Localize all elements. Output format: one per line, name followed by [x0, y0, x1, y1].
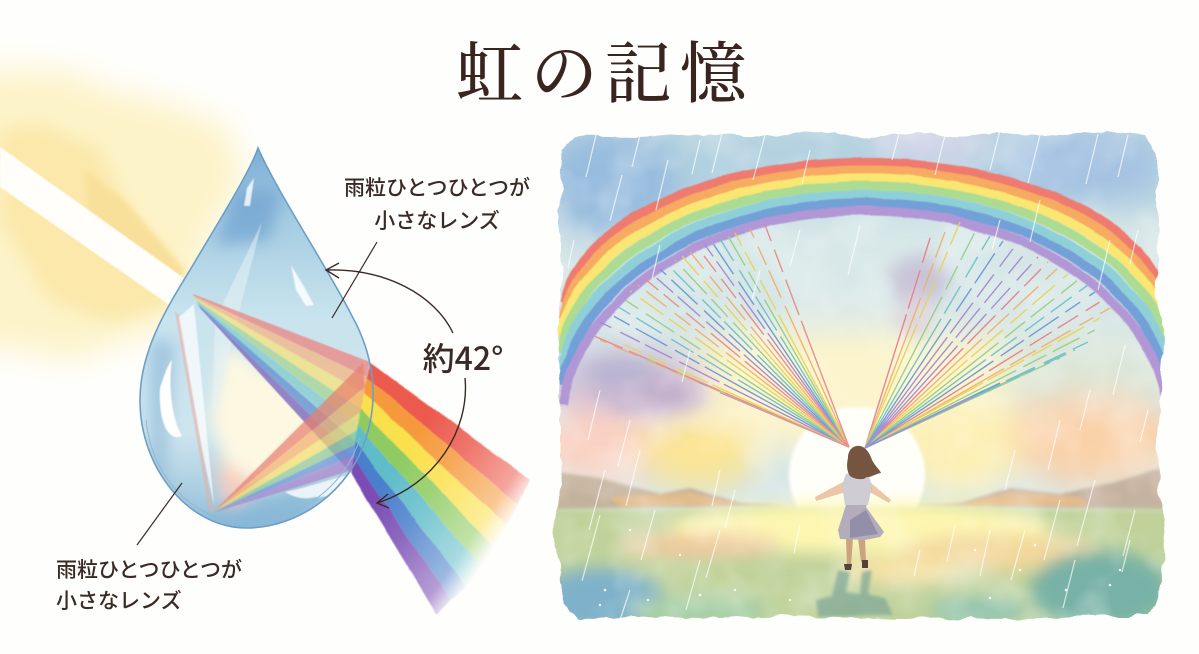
label: lower: 雨粒ひとつひとつが: [56, 554, 242, 584]
sky and land washes: [552, 130, 1166, 621]
arrow: upper arc to drop: [326, 263, 453, 333]
label: angle: 約42°: [423, 334, 503, 380]
white light beam: [0, 147, 196, 304]
internal reflected pink ray: [175, 312, 213, 513]
sun: [788, 406, 926, 508]
water drop body: [140, 148, 373, 540]
internal dispersed rainbow, reflected leg: [212, 363, 370, 513]
label: lower: 小さなレンズ: [56, 585, 182, 615]
yellow sunlight wash: [0, 70, 245, 362]
outgoing rainbow beam: [351, 362, 530, 615]
internal dispersed rainbow, first leg: [193, 294, 370, 473]
leader line: upper label: [332, 242, 377, 318]
panel: raindrop prism diagram: [0, 70, 530, 615]
title: 虹の記憶: [456, 21, 754, 117]
light rays from rainbow to viewer, left fan: [592, 225, 849, 447]
panel: watercolor rainbow scene: [552, 130, 1166, 621]
rain streaks: [568, 130, 1148, 620]
figure: girl seen from behind: [815, 446, 893, 617]
leader line: lower label: [137, 483, 182, 545]
drop highlights: [160, 178, 352, 498]
sparkling droplets on ground: [599, 529, 1121, 606]
rainbow arch: [560, 162, 1170, 404]
arrow: lower arc to beam: [377, 378, 465, 508]
light rays from rainbow to viewer, right fan: [865, 222, 1110, 448]
label: upper: 小さなレンズ: [374, 205, 500, 235]
drop outline: [140, 148, 373, 528]
label: upper: 雨粒ひとつひとつが: [344, 172, 530, 202]
